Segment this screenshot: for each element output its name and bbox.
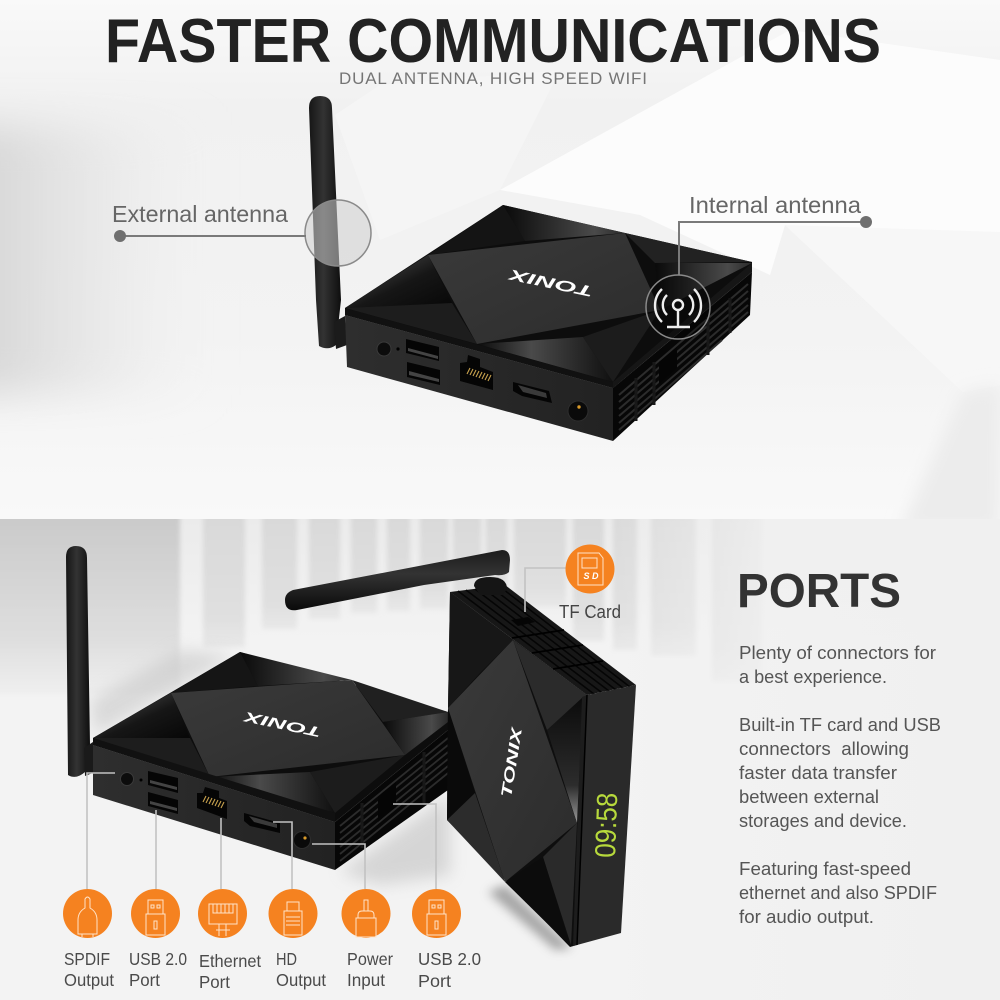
icon: power <box>342 889 390 938</box>
text block: ports description: between external <box>739 787 879 807</box>
panel: bottom background <box>0 510 1000 1000</box>
icon: Ethernet <box>198 889 247 938</box>
text block: ports description: for audio output. <box>739 907 874 927</box>
label: TF Card: TF Card <box>559 602 621 622</box>
port labels: Output <box>64 970 114 990</box>
logo: TONIX: TONIX <box>506 265 595 300</box>
icon: wifi antenna <box>655 289 701 327</box>
antenna: folded <box>285 550 510 610</box>
port labels: Port <box>199 972 230 992</box>
device: upright streaming box with LED display <box>285 550 636 947</box>
icon: SD card: S D <box>583 571 599 581</box>
LED clock display: 09:58 <box>590 792 624 858</box>
text block: ports description: faster data transfer <box>739 763 897 783</box>
port labels: USB 2.0 <box>129 949 187 969</box>
text block: ports description: storages and device. <box>739 811 907 831</box>
panel: top background <box>0 0 1000 530</box>
port labels: Power <box>347 949 393 969</box>
port labels: HD <box>276 949 297 969</box>
port labels: Output <box>276 970 326 990</box>
heading: PORTS: PORTS <box>737 565 901 618</box>
text block: ports description: Featuring fast-speed <box>739 859 911 879</box>
text block: ports description: ethernet and also SPDIF <box>739 883 937 903</box>
text block: ports description: Plenty of connectors for <box>739 643 936 663</box>
text block: ports description <box>739 643 941 927</box>
port labels <box>64 949 481 992</box>
leader lines <box>87 568 566 889</box>
text block: ports description: a best experience. <box>739 667 887 687</box>
icon: USB <box>412 889 461 938</box>
port labels: Ethernet <box>199 951 261 971</box>
callout: external antenna <box>112 200 371 266</box>
icon: HD <box>268 889 318 938</box>
port labels: SPDIF <box>64 949 110 969</box>
callout: external antenna: External antenna <box>112 201 288 227</box>
logo: TONIX: TONIX <box>498 725 526 799</box>
port labels: USB 2.0 <box>418 949 481 969</box>
icon: SD card <box>566 544 614 594</box>
port labels: Port <box>129 970 160 990</box>
logo: TONIX: TONIX <box>240 708 323 741</box>
icon: SPDIF <box>63 889 112 938</box>
icon: USB <box>131 889 180 938</box>
callout: internal antenna <box>646 192 872 339</box>
device: bottom-left streaming box <box>66 546 448 870</box>
device: top streaming box with antenna <box>309 96 752 441</box>
text block: ports description: Built-in TF card and USB <box>739 715 941 735</box>
callout: internal antenna: Internal antenna <box>689 192 861 218</box>
title: FASTER COMMUNICATIONS <box>105 7 881 76</box>
subtitle: DUAL ANTENNA, HIGH SPEED WIFI <box>339 69 647 88</box>
port labels: Port <box>418 971 451 991</box>
text block: ports description: connectors allowing <box>739 739 909 759</box>
port labels: Input <box>347 970 385 990</box>
